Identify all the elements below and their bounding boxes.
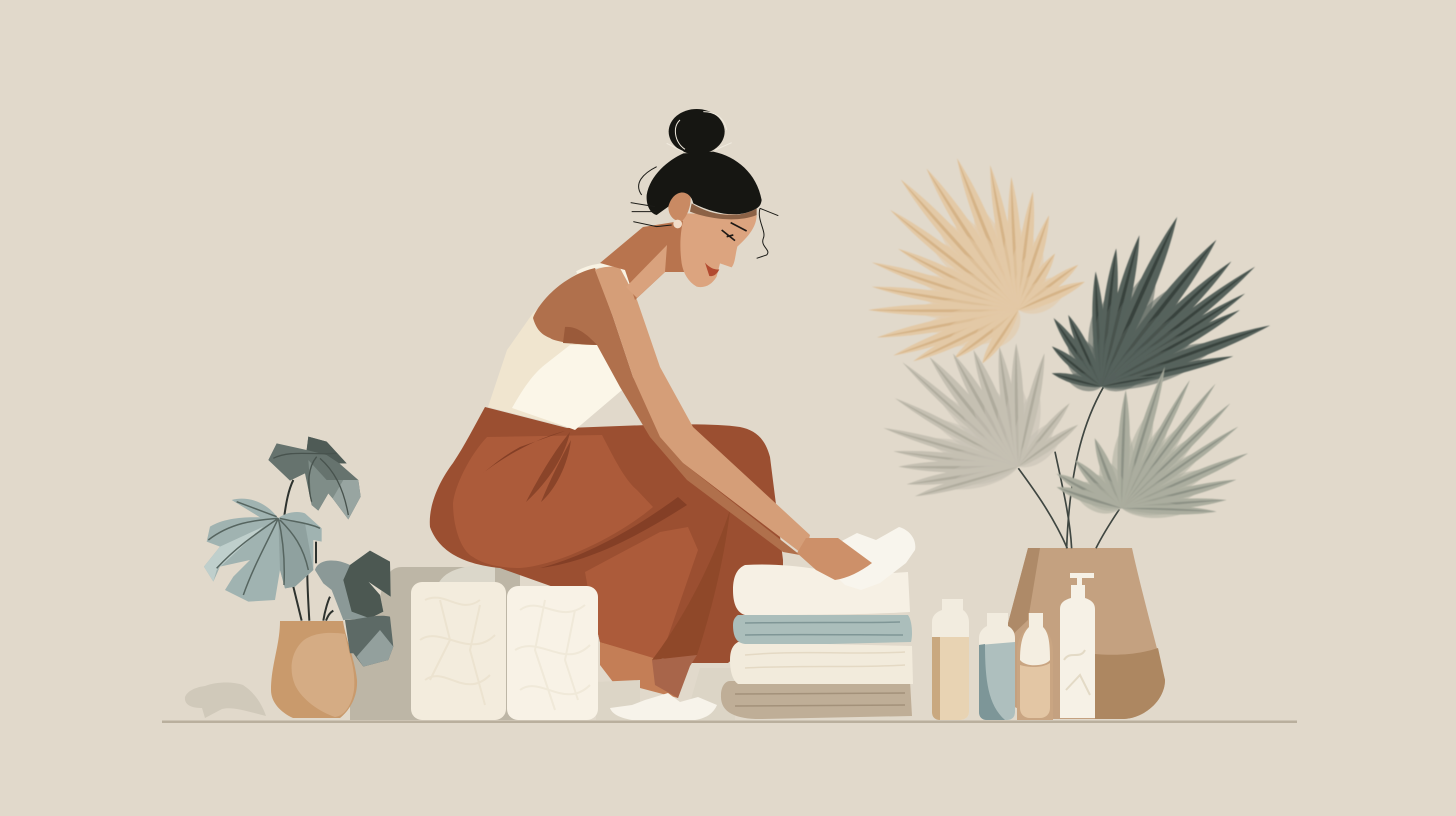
bun highlights bbox=[667, 112, 732, 152]
pot bbox=[271, 621, 357, 718]
woman bbox=[430, 109, 810, 720]
leaf top bbox=[268, 437, 361, 519]
shoulder shadow bbox=[563, 327, 597, 345]
grey stool bbox=[350, 567, 520, 720]
left cushion bbox=[411, 582, 506, 720]
cloth in hand bbox=[838, 527, 915, 590]
top bbox=[488, 265, 635, 430]
hair bbox=[647, 152, 762, 215]
cushions bbox=[411, 582, 598, 720]
left potted plant bbox=[204, 437, 393, 718]
hand bbox=[797, 538, 872, 580]
ground line bbox=[162, 720, 1297, 723]
neck bbox=[600, 220, 687, 300]
leaf middle bbox=[204, 499, 322, 602]
pump bottle bbox=[1060, 573, 1095, 718]
eye and brow bbox=[722, 223, 747, 241]
palm grey bbox=[881, 343, 1084, 505]
top towel bbox=[733, 564, 910, 615]
face bbox=[680, 213, 757, 287]
palm beige bbox=[868, 153, 1089, 372]
pale dome bbox=[436, 565, 495, 590]
leaf lower right bbox=[315, 551, 391, 620]
skirt bbox=[430, 407, 783, 698]
floor cloth shadow bbox=[596, 668, 735, 720]
plant stems bbox=[284, 480, 333, 621]
far arm and shoulder bbox=[533, 268, 800, 555]
right cushion bbox=[507, 586, 598, 720]
head and face bbox=[631, 109, 778, 287]
monstera leaves bbox=[204, 437, 393, 667]
floor cloth bbox=[610, 693, 717, 720]
blue towel bbox=[733, 615, 912, 644]
palm arrangement bbox=[868, 153, 1274, 548]
vase bbox=[1000, 548, 1165, 719]
shell shape bbox=[185, 682, 266, 718]
leaf bottom bbox=[345, 616, 393, 667]
bottle two bbox=[979, 613, 1015, 720]
cream towel bbox=[730, 642, 913, 684]
bottle three bbox=[1017, 613, 1053, 720]
neck highlight bbox=[626, 245, 667, 298]
lower leg bbox=[600, 637, 690, 698]
near arm bbox=[595, 267, 810, 556]
bottle one bbox=[932, 599, 969, 720]
earring bbox=[673, 220, 682, 228]
palm dark bbox=[1045, 210, 1274, 398]
taupe towel bbox=[721, 681, 912, 719]
towel stack bbox=[721, 564, 913, 719]
hairline shadow bbox=[690, 203, 757, 219]
bottles bbox=[932, 573, 1095, 720]
bun bbox=[669, 109, 725, 154]
ear bbox=[668, 189, 691, 222]
stems bbox=[1018, 387, 1119, 548]
hair wisps bbox=[631, 167, 778, 258]
palm sage bbox=[1051, 364, 1252, 520]
lips bbox=[705, 263, 719, 276]
